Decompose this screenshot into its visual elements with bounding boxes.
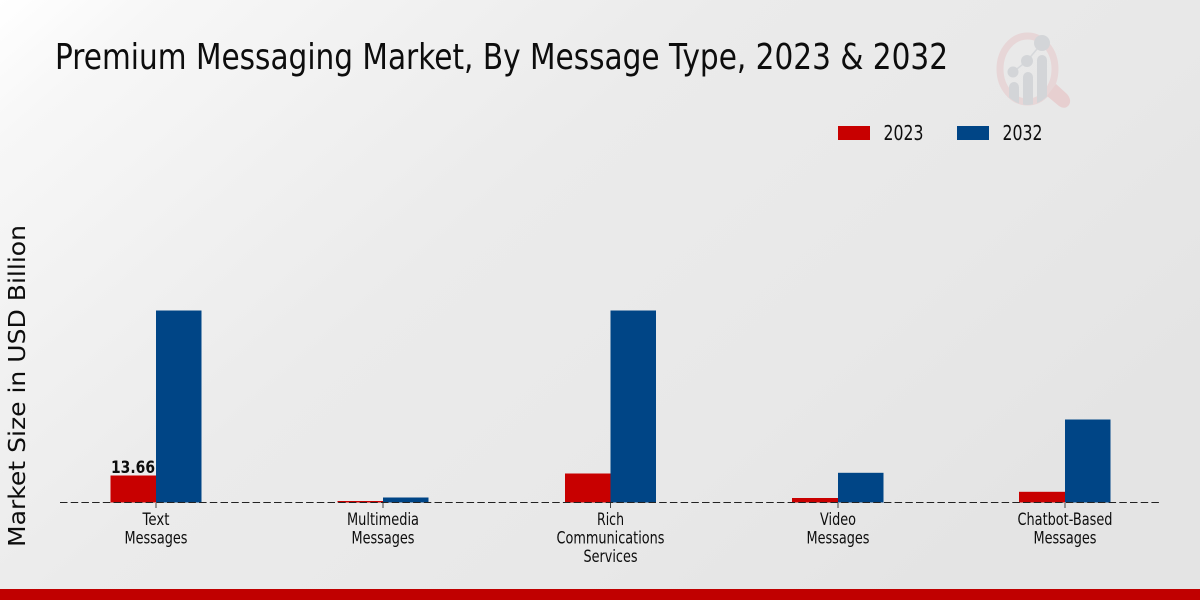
legend item: 2032 bbox=[957, 121, 1042, 145]
category label: Video Messages: Video bbox=[820, 510, 856, 530]
y-axis label: Market Size in USD Billion bbox=[5, 225, 31, 547]
x-axis dashed baseline bbox=[60, 502, 1160, 504]
x-axis ticks bbox=[156, 503, 1065, 508]
bottom red band bbox=[0, 589, 1200, 600]
legend item: 2032: 2032 bbox=[1002, 121, 1042, 145]
icon: watermark logo bbox=[1000, 35, 1070, 110]
category label: Text Messages: Text bbox=[142, 510, 170, 530]
category label: Chatbot-Based Messages: Chatbot-Based bbox=[1018, 510, 1112, 530]
bars: Text Messages bbox=[110, 310, 202, 502]
bars: Rich Communications Services bbox=[565, 310, 656, 502]
data label: 13.66: 13.66 bbox=[111, 458, 155, 477]
legend item: 2023 bbox=[838, 121, 924, 145]
title: Premium Messaging Market, By Message Type, 2023 & 2032 bbox=[55, 37, 948, 78]
category label: Multimedia Messages: Messages bbox=[352, 528, 415, 548]
bars: Chatbot-Based Messages bbox=[1019, 420, 1110, 502]
category label: Rich Communications Services: Communications bbox=[556, 528, 665, 548]
category label: Rich Communications Services: Rich bbox=[597, 510, 624, 530]
category label: Multimedia Messages: Multimedia bbox=[347, 510, 419, 530]
legend item: 2023: 2023 bbox=[884, 121, 924, 145]
category label: Rich Communications Services: Services bbox=[584, 547, 638, 567]
bar chart bbox=[60, 310, 1160, 508]
category label: Video Messages: Messages bbox=[806, 528, 870, 548]
category label: Text Messages: Messages bbox=[124, 528, 188, 548]
bars: Multimedia Messages bbox=[338, 498, 428, 502]
legend bbox=[838, 121, 1042, 145]
category label: Chatbot-Based Messages: Messages bbox=[1034, 528, 1097, 548]
bars: Video Messages bbox=[792, 473, 884, 502]
